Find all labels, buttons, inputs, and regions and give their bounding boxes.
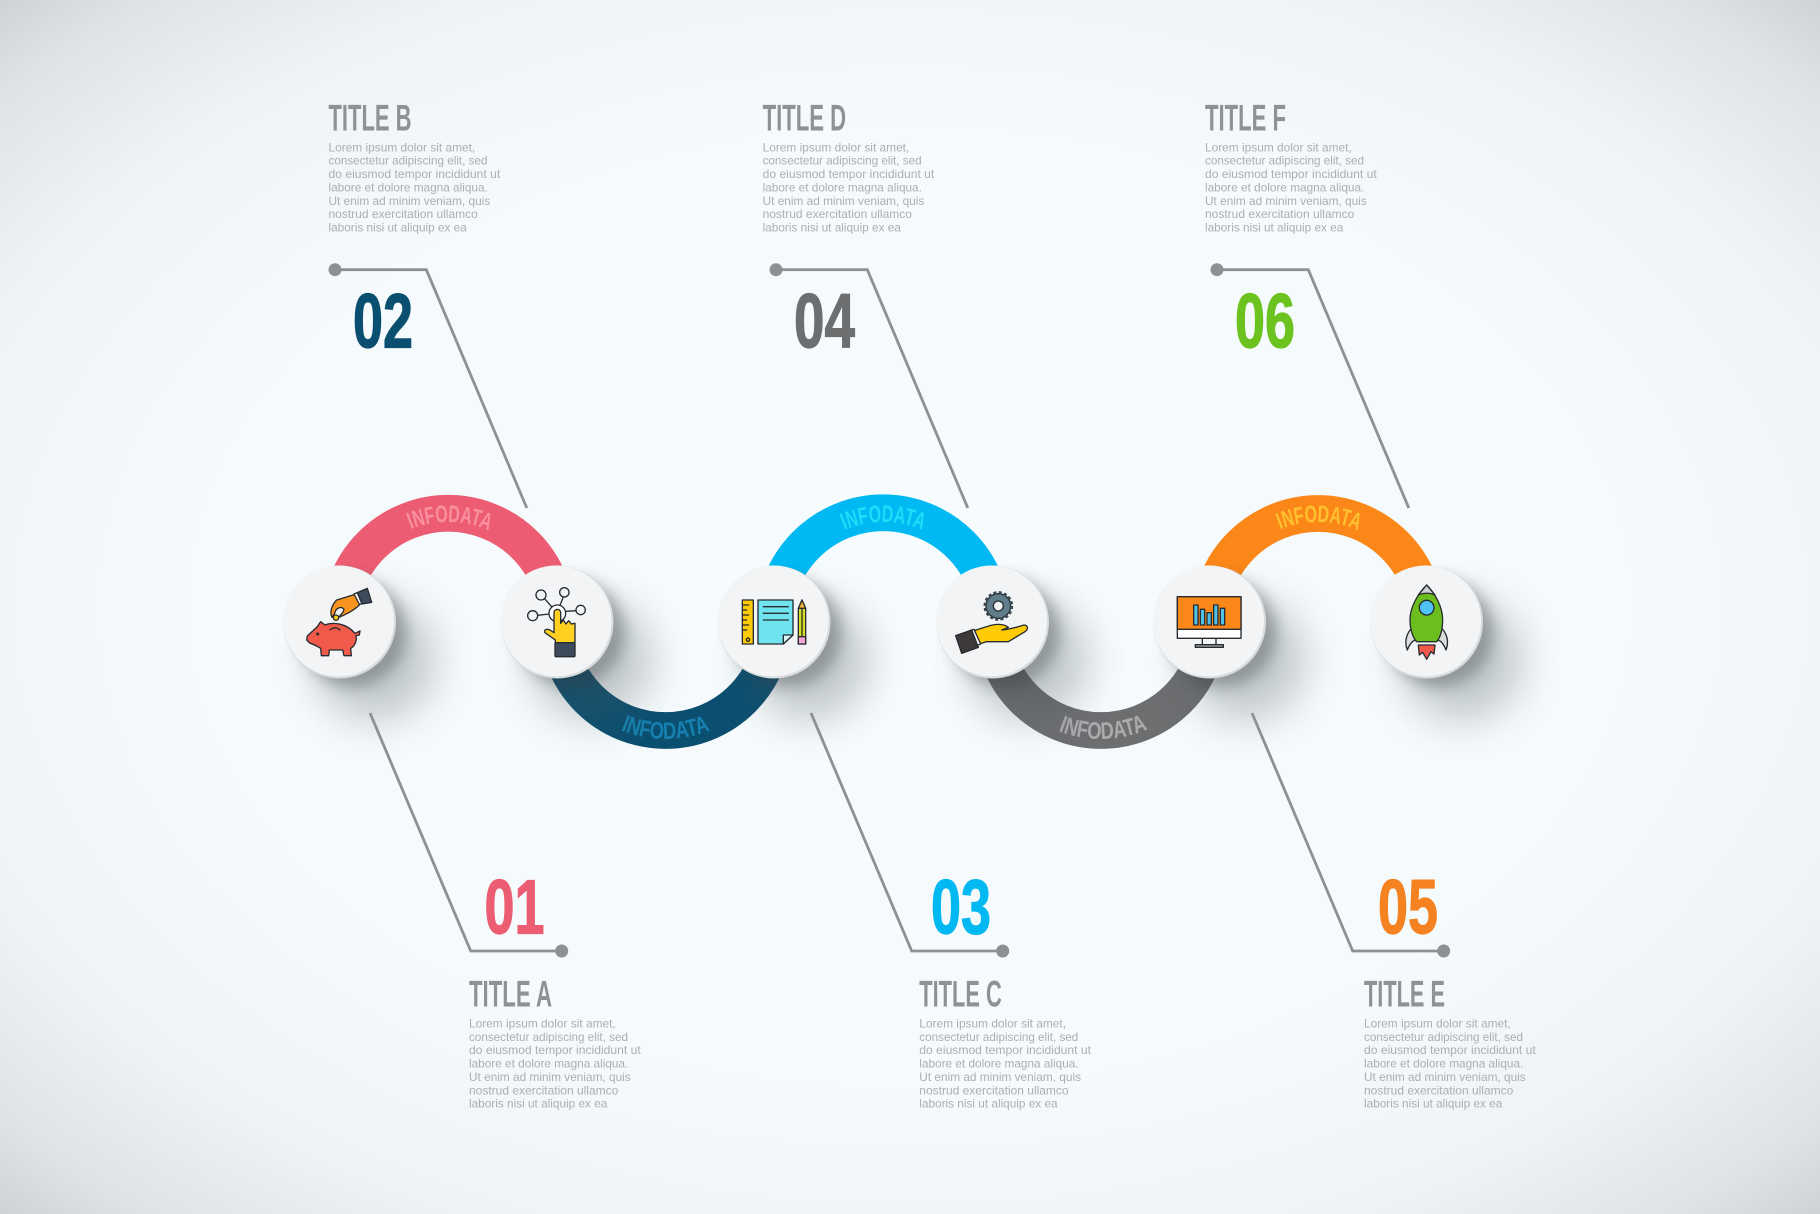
arc 5 orange xyxy=(1204,495,1432,575)
number 02: 02 xyxy=(353,278,413,364)
body copy: laboris nisi ut aliquip ex ea xyxy=(763,221,901,235)
number 04: 04 xyxy=(794,278,855,364)
body copy: do eiusmod tempor incididunt ut xyxy=(763,167,935,181)
leader line 06 xyxy=(1210,263,1409,508)
arc 5 orange: INFODATA xyxy=(1275,506,1360,530)
body copy xyxy=(763,140,935,235)
icon: ruler note pencil xyxy=(742,600,806,644)
heading: TITLE B xyxy=(328,98,412,139)
body copy: Lorem ipsum dolor sit amet, xyxy=(469,1016,616,1030)
arc 2 dark blue xyxy=(552,669,780,749)
heading: TITLE C xyxy=(919,974,1002,1015)
body copy: laboris nisi ut aliquip ex ea xyxy=(919,1097,1058,1111)
body copy xyxy=(328,140,501,235)
body copy: Ut enim ad minim veniam, quis xyxy=(919,1070,1081,1084)
text block: title C xyxy=(919,974,1092,1111)
body copy xyxy=(469,1016,641,1111)
body copy: labore et dolore magna aliqua. xyxy=(763,180,922,194)
body copy: do eiusmod tempor incididunt ut xyxy=(328,167,501,181)
number 03: 03 xyxy=(931,864,991,950)
body copy: Lorem ipsum dolor sit amet, xyxy=(1205,140,1352,154)
body copy: labore et dolore magna aliqua. xyxy=(919,1057,1079,1071)
leader line 04 xyxy=(770,263,968,508)
heading: TITLE F xyxy=(1205,98,1286,139)
arc 2 dark blue: INFODATA xyxy=(622,715,710,740)
node 4: hand and gear xyxy=(936,566,1049,678)
body copy: nostrud exercitation ullamco xyxy=(1364,1083,1514,1097)
arc 1 pink: INFODATA xyxy=(406,505,490,530)
body copy: consectetur adipiscing elit, sed xyxy=(328,154,488,168)
node 2: touch network xyxy=(500,566,614,678)
body copy: do eiusmod tempor incididunt ut xyxy=(1205,167,1377,181)
body copy: do eiusmod tempor incididunt ut xyxy=(469,1043,641,1057)
text block: title A xyxy=(469,974,641,1111)
body copy: laboris nisi ut aliquip ex ea xyxy=(469,1097,608,1111)
node 3: documents xyxy=(718,566,830,678)
body copy: laboris nisi ut aliquip ex ea xyxy=(328,221,467,235)
arc 3 cyan: INFODATA xyxy=(840,506,924,530)
body copy: nostrud exercitation ullamco xyxy=(1205,207,1355,221)
leader line 05 xyxy=(1252,713,1450,958)
body copy: Lorem ipsum dolor sit amet, xyxy=(763,140,909,154)
icon: rocket xyxy=(1406,585,1447,659)
body copy: Ut enim ad minim veniam, quis xyxy=(469,1070,631,1084)
text block: title F xyxy=(1205,98,1377,235)
heading: TITLE D xyxy=(763,98,846,139)
number 06: 06 xyxy=(1235,278,1295,364)
text block: title B xyxy=(328,98,501,235)
body copy: nostrud exercitation ullamco xyxy=(919,1083,1069,1097)
body copy: Lorem ipsum dolor sit amet, xyxy=(1364,1016,1511,1030)
leader line 02 xyxy=(328,263,527,508)
body copy: labore et dolore magna aliqua. xyxy=(328,180,488,194)
body copy: laboris nisi ut aliquip ex ea xyxy=(1364,1097,1503,1111)
icon: touch network xyxy=(528,588,585,657)
body copy xyxy=(919,1016,1092,1111)
arc 3 cyan xyxy=(768,494,998,575)
body copy: consectetur adipiscing elit, sed xyxy=(763,154,922,168)
body copy: Ut enim ad minim veniam, quis xyxy=(763,194,924,208)
body copy: nostrud exercitation ullamco xyxy=(328,207,478,221)
body copy: consectetur adipiscing elit, sed xyxy=(1364,1030,1523,1044)
node 1: piggy bank xyxy=(283,566,396,678)
body copy: laboris nisi ut aliquip ex ea xyxy=(1205,221,1344,235)
body copy xyxy=(1205,140,1377,235)
body copy: Lorem ipsum dolor sit amet, xyxy=(328,140,475,154)
body copy: Ut enim ad minim veniam, quis xyxy=(1205,194,1367,208)
body copy: nostrud exercitation ullamco xyxy=(763,207,912,221)
leader line 01 xyxy=(370,713,568,958)
body copy: Ut enim ad minim veniam, quis xyxy=(1364,1070,1526,1084)
body copy: consectetur adipiscing elit, sed xyxy=(919,1030,1078,1044)
icon: piggy bank xyxy=(307,588,372,656)
node shadows xyxy=(297,577,1522,720)
body copy: labore et dolore magna aliqua. xyxy=(1205,180,1364,194)
body copy: labore et dolore magna aliqua. xyxy=(1364,1057,1523,1071)
body copy: consectetur adipiscing elit, sed xyxy=(1205,154,1364,168)
wave ribbon xyxy=(334,494,1432,749)
body copy: Lorem ipsum dolor sit amet, xyxy=(919,1016,1066,1030)
body copy xyxy=(1364,1016,1536,1111)
body copy: labore et dolore magna aliqua. xyxy=(469,1057,628,1071)
heading: TITLE A xyxy=(469,974,552,1015)
arc 1 pink xyxy=(334,494,562,575)
body copy: consectetur adipiscing elit, sed xyxy=(469,1030,628,1044)
text block: title D xyxy=(763,98,935,235)
node 6: rocket xyxy=(1370,566,1483,678)
body copy: do eiusmod tempor incididunt ut xyxy=(1364,1043,1536,1057)
icon: monitor chart xyxy=(1177,597,1241,647)
node 5: monitor xyxy=(1153,566,1266,678)
arc 4 gray xyxy=(987,669,1215,749)
number 01: 01 xyxy=(484,864,544,950)
arc 4 gray: INFODATA xyxy=(1060,716,1148,739)
body copy: Ut enim ad minim veniam, quis xyxy=(328,194,490,208)
leader line 03 xyxy=(811,713,1009,958)
body copy: nostrud exercitation ullamco xyxy=(469,1083,619,1097)
body copy: do eiusmod tempor incididunt ut xyxy=(919,1043,1092,1057)
number 05: 05 xyxy=(1378,864,1438,950)
text block: title E xyxy=(1364,974,1536,1111)
icon: hand with gear xyxy=(956,593,1027,653)
heading: TITLE E xyxy=(1364,974,1445,1015)
